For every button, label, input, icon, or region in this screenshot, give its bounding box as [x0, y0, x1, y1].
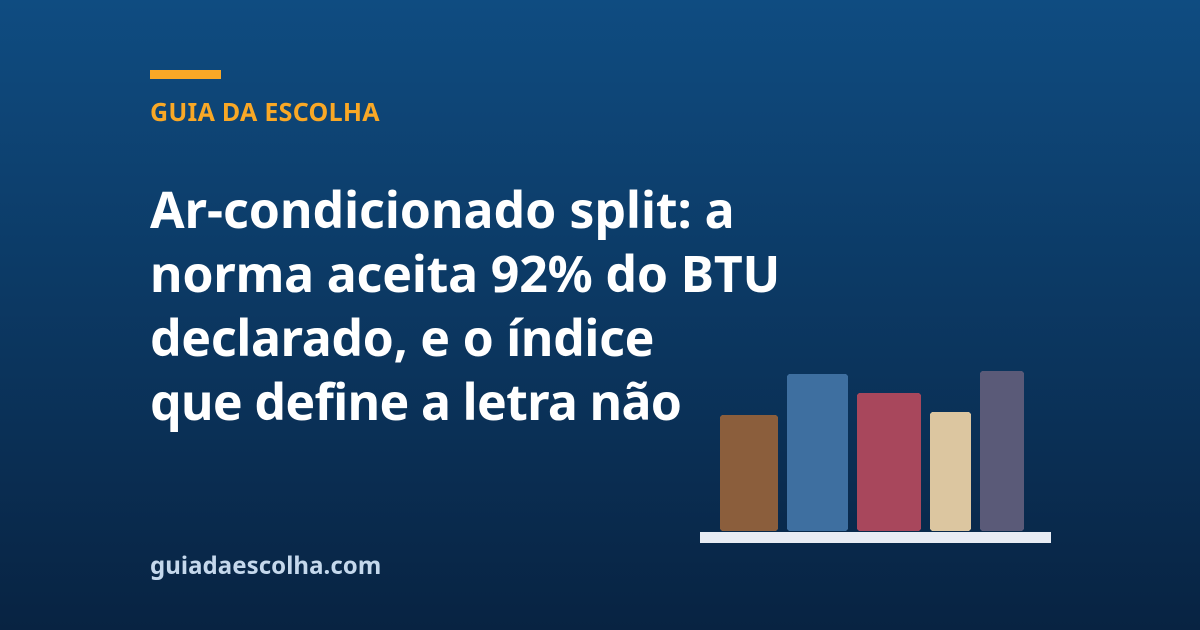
title: que define a letra não [150, 367, 681, 435]
book: cream [930, 412, 971, 531]
title: Ar-condicionado split: a [150, 175, 735, 243]
book: red [857, 393, 921, 531]
book: brown [720, 415, 778, 531]
book: slate [980, 371, 1024, 531]
book: blue [787, 374, 848, 531]
eyebrow label: GUIA DA ESCOLHA [150, 95, 380, 129]
accent bar [150, 70, 221, 79]
title: norma aceita 92% do BTU [150, 239, 780, 307]
title: declarado, e o índice [150, 303, 654, 371]
shelf [700, 532, 1051, 543]
title [150, 175, 780, 435]
site url: guiadaescolha.com [150, 549, 381, 582]
